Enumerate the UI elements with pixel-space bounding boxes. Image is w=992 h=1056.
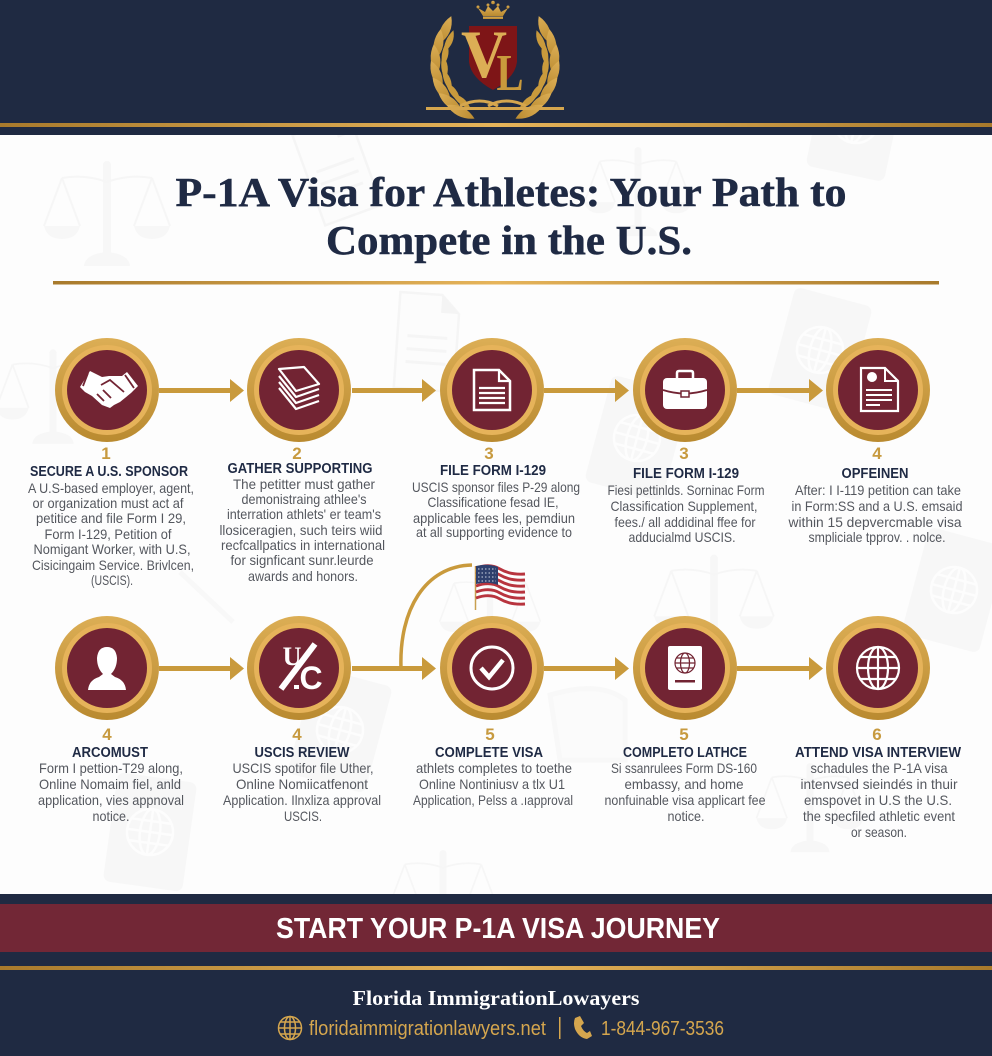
- step number: 3: [679, 444, 689, 463]
- step number: 6: [872, 725, 882, 744]
- step text: application, vies appnoval: [38, 792, 184, 808]
- step 2: [220, 338, 385, 584]
- icon: phone: [574, 1016, 592, 1039]
- icon: web globe: [278, 1016, 302, 1040]
- step text: Form I-129, Petition of: [44, 526, 172, 542]
- title: Compete in the U.S.: [326, 217, 692, 263]
- step number: 5: [679, 725, 689, 744]
- step text: Online Nomiicatfenont: [236, 776, 368, 792]
- step text: [412, 479, 580, 540]
- step text: within 15 depvercmable visa: [788, 514, 962, 530]
- website: floridaimmigrationlawyers.net: [309, 1018, 546, 1040]
- logo base line: [426, 107, 564, 110]
- step heading: SECURE A U.S. SPONSOR: [30, 464, 188, 480]
- step text: Classification Supplement,: [610, 498, 758, 514]
- step text: [223, 760, 381, 824]
- footer contact: [278, 1016, 724, 1040]
- arrows row 1: [159, 379, 823, 402]
- step text: [608, 482, 764, 545]
- step text: [788, 482, 962, 545]
- step text: or season.: [851, 824, 907, 840]
- step text: embassy, and home: [624, 776, 744, 792]
- icon: crown: [476, 1, 510, 19]
- step text: After: I I-119 petition can take: [795, 482, 961, 498]
- step text: Application. Ilnxliza approval: [223, 792, 381, 808]
- step text: [800, 760, 958, 840]
- step text: [413, 760, 573, 808]
- icon: uscis mark: C: [299, 660, 323, 696]
- step text: the specfiled athletic event: [803, 808, 955, 824]
- title rule: [53, 281, 939, 284]
- step 8: [413, 616, 573, 808]
- step text: notice.: [92, 808, 130, 824]
- icon: uscis mark: [247, 616, 351, 720]
- step heading: COMPLETO LATHCE: [623, 745, 747, 761]
- step number: 3: [484, 444, 494, 463]
- footer firm name: Florida ImmigrationLowayers: [352, 986, 640, 1010]
- step text: Nomigant Worker, with U.S,: [34, 541, 190, 557]
- step text: or organization must act af: [32, 495, 184, 511]
- step text: nonfuinable visa applicart fee: [604, 792, 766, 808]
- step text: in Form:SS and a U.S. emsaid: [792, 498, 962, 514]
- step 5: [788, 338, 962, 545]
- step 6: [38, 616, 184, 824]
- step number: 4: [872, 444, 882, 463]
- step text: demonistraing athlee's: [242, 491, 366, 507]
- icon: globe: [826, 616, 930, 720]
- shield: [469, 26, 517, 90]
- step number: 5: [485, 725, 495, 744]
- step text: interration athlets' er team's: [227, 506, 381, 522]
- step text: Classificatione fesad IE,: [428, 494, 558, 510]
- step heading: USCIS REVIEW: [254, 745, 350, 761]
- step text: [28, 480, 194, 588]
- step text: Form I pettion-T29 along,: [39, 760, 183, 776]
- logo: L: [496, 45, 524, 102]
- step text: A U.S-based employer, agent,: [28, 480, 194, 496]
- title: [176, 169, 846, 263]
- step heading: ATTEND VISA INTERVIEW: [795, 745, 961, 761]
- step number: 1: [101, 444, 111, 463]
- icon: us flag: [476, 565, 525, 610]
- step number: 4: [102, 725, 112, 744]
- step text: Online Nomaim fiel, anld: [39, 776, 181, 792]
- step text: awards and honors.: [248, 568, 358, 584]
- step text: The petitter must gather: [233, 476, 375, 492]
- header band: [0, 0, 992, 135]
- step number: 4: [292, 725, 302, 744]
- footer background: [0, 894, 992, 1056]
- step text: Si ssanrulees Form DS-160: [611, 760, 757, 776]
- step text: (USCIS).: [91, 572, 133, 588]
- step 9: [604, 616, 766, 824]
- step 7: [223, 616, 381, 824]
- step 10: [795, 616, 961, 840]
- icon: briefcase: [633, 338, 737, 442]
- step text: for signficant sunr.leurde: [230, 552, 374, 568]
- step 3: [412, 338, 580, 540]
- step 1: [28, 338, 194, 588]
- step heading: GATHER SUPPORTING: [228, 461, 372, 477]
- laurel wreath: [427, 14, 563, 123]
- step text: [38, 760, 184, 824]
- arrows row 2: [159, 657, 823, 680]
- step text: Application, Pelss a .ıapproval: [413, 792, 573, 808]
- divider: [559, 1017, 560, 1039]
- icon: uscis mark: U: [283, 642, 302, 671]
- icon: check mark: [440, 616, 544, 720]
- letters VL: V: [461, 16, 507, 92]
- icon: form document: [440, 338, 544, 442]
- curved connector to flag: [401, 565, 472, 668]
- step text: USCIS.: [284, 808, 322, 824]
- icon: passport: [633, 616, 737, 720]
- step text: petitice and file Form I 29,: [36, 510, 186, 526]
- step text: recfcallpatics in international: [221, 537, 385, 553]
- step heading: OPFEINEN: [842, 466, 908, 482]
- icon: approval certificate: [826, 338, 930, 442]
- step text: [604, 760, 766, 824]
- step text: Online Nontiniusv a tlx U1: [419, 776, 565, 792]
- step text: llosiceragien, such teirs wiid: [220, 522, 382, 538]
- step heading: FILE FORM I-129: [440, 463, 546, 479]
- step text: intenvsed sieindés in thuir: [800, 776, 958, 792]
- icon: handshake: [55, 338, 159, 442]
- step text: at all supporting evidence to: [416, 524, 572, 540]
- icon: person: [55, 616, 159, 720]
- step heading: COMPLETE VISA: [435, 745, 543, 761]
- call to action banner: START YOUR P-1A VISA JOURNEY: [276, 913, 720, 945]
- step text: fees./ all addidinal ffee for: [614, 514, 756, 530]
- step text: schadules the P-1A visa: [810, 760, 948, 776]
- step number: 2: [292, 444, 302, 463]
- step text: applicable fees les, pemdiun: [413, 510, 575, 526]
- step text: USCIS spotifor file Uther,: [232, 760, 374, 776]
- phone number: 1-844-967-3536: [601, 1018, 724, 1040]
- title: P-1A Visa for Athletes: Your Path to: [176, 169, 846, 215]
- icon: document stack: [247, 338, 351, 442]
- step heading: FILE FORM I-129: [633, 466, 739, 482]
- step heading: ARCOMUST: [72, 745, 148, 761]
- logo: [426, 1, 564, 123]
- step text: Cisicingaim Service. Brivlcen,: [32, 557, 194, 573]
- call to action banner: [0, 904, 992, 952]
- step text: Fiesi pettinlds. Sorninac Form: [608, 482, 764, 498]
- step text: smpliciale tpprov. . nolce.: [808, 529, 946, 545]
- step text: notice.: [668, 808, 704, 824]
- step text: adducialmd USCIS.: [628, 529, 736, 545]
- step text: emspovet in U.S the U.S.: [804, 792, 952, 808]
- step text: [220, 476, 385, 584]
- step text: USCIS sponsor files P-29 along: [412, 479, 580, 495]
- step text: athlets completes to toethe: [416, 760, 572, 776]
- step 4: [608, 338, 764, 545]
